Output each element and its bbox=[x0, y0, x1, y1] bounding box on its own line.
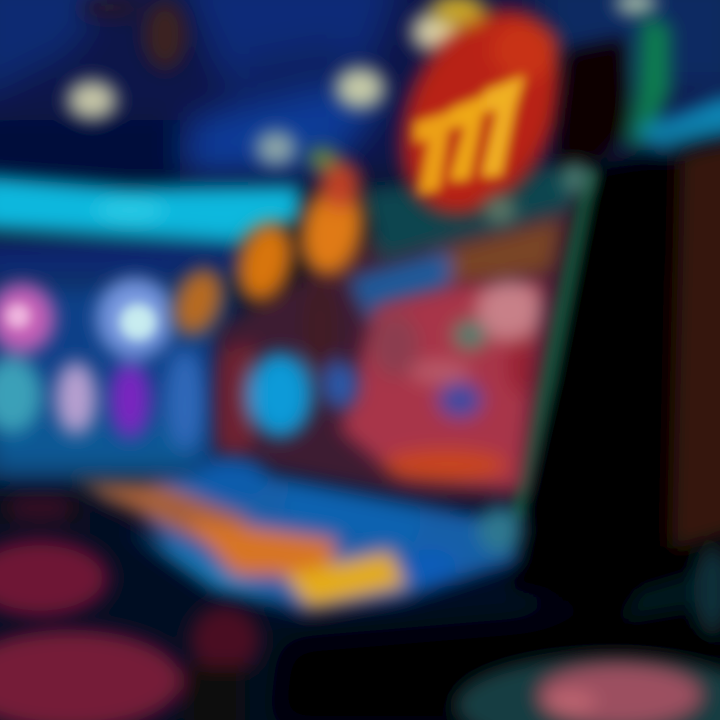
blue screen panel bbox=[221, 282, 358, 455]
ceiling fixture bbox=[80, 0, 187, 70]
right dark cabinet bbox=[270, 140, 720, 720]
red sign with yellow 777 bbox=[370, 0, 594, 241]
orange lamps on machine tops bbox=[166, 148, 371, 341]
main screen bbox=[340, 162, 589, 490]
left machine screens bbox=[0, 278, 205, 450]
stools and floor bbox=[0, 490, 259, 720]
cyan neon band bbox=[0, 176, 300, 278]
central machine body bbox=[215, 160, 590, 500]
machine side: black cabinet and green trim bbox=[555, 15, 720, 170]
ceiling: dark blue background bbox=[0, 0, 720, 180]
green screen edge bbox=[510, 170, 598, 520]
control deck bbox=[70, 458, 522, 612]
left bank of machines bbox=[0, 275, 230, 480]
lower right floor glow bbox=[455, 544, 720, 720]
ceiling lights bbox=[68, 0, 656, 165]
